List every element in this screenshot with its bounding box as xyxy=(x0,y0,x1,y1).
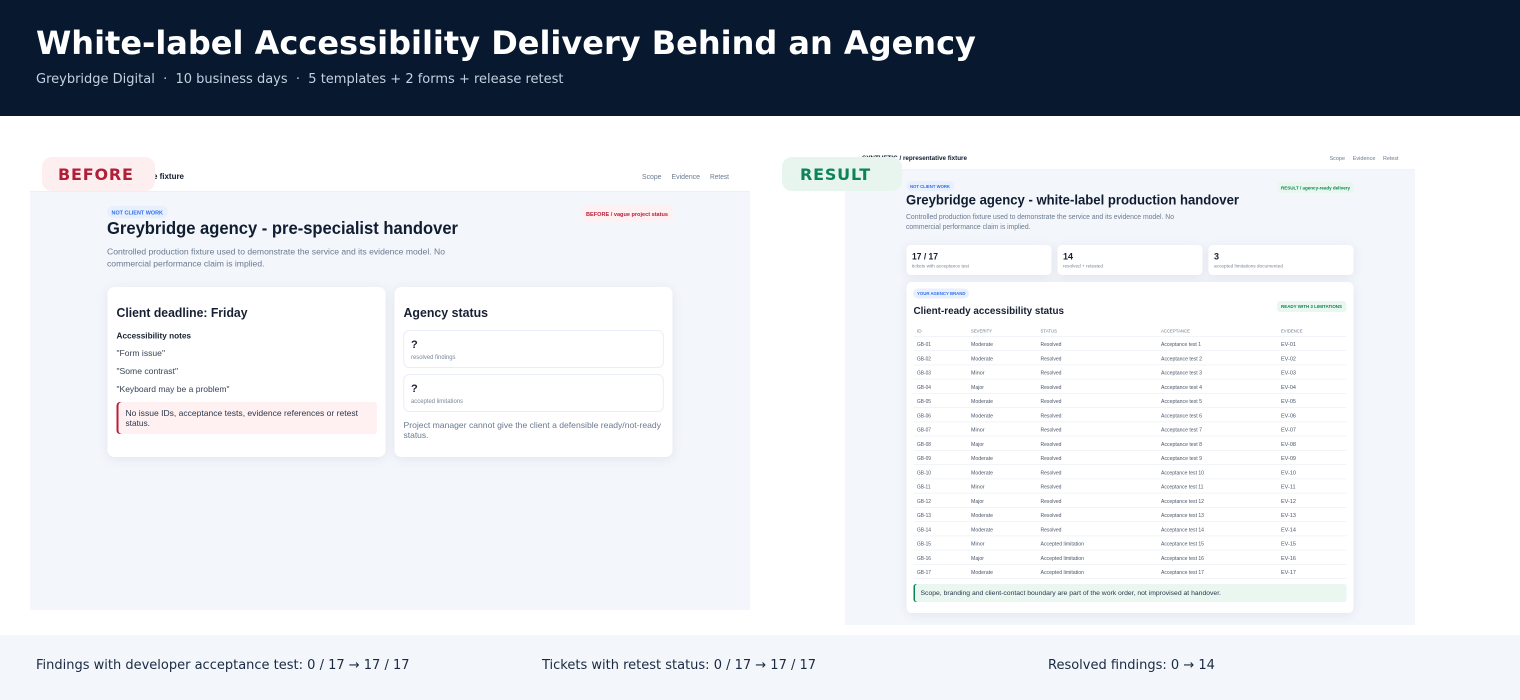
accessibility notes: "Some contrast" xyxy=(116,367,178,376)
stat: tickets with acceptance test: tickets with acceptance test xyxy=(912,264,970,270)
row GB-10: GB-10 xyxy=(917,470,931,476)
status badge: vague project status xyxy=(581,206,673,221)
metric: accepted limitations unknown: ? xyxy=(411,383,418,395)
stat: resolved and retested: resolved + retested xyxy=(1063,264,1103,270)
row GB-10: EV-10 xyxy=(1281,470,1296,476)
row GB-04: Resolved xyxy=(1040,385,1062,391)
row GB-11: EV-11 xyxy=(1281,485,1296,491)
chip: not client work: NOT CLIENT WORK xyxy=(112,210,164,216)
fixture navigation: Retest xyxy=(710,172,729,181)
row GB-07: Acceptance test 7 xyxy=(1161,428,1202,434)
row GB-15: Accepted limitation xyxy=(1040,542,1084,548)
row GB-13: EV-13 xyxy=(1281,513,1296,519)
row GB-06: EV-06 xyxy=(1281,413,1296,419)
card heading: agency status: Agency status xyxy=(404,306,488,320)
row GB-08: Resolved xyxy=(1040,442,1062,448)
fixture navigation: Evidence xyxy=(1353,156,1376,162)
row GB-03: GB-03 xyxy=(917,371,931,377)
row GB-15: EV-15 xyxy=(1281,542,1296,548)
row GB-09: EV-09 xyxy=(1281,456,1296,462)
row GB-16: GB-16 xyxy=(917,556,931,562)
row GB-14 xyxy=(914,527,1346,536)
metric: resolved findings unknown: ? xyxy=(411,339,418,351)
row GB-08: Major xyxy=(971,442,984,448)
table header: ACCEPTANCE xyxy=(1161,328,1190,333)
row GB-06: Acceptance test 6 xyxy=(1161,413,1202,419)
row GB-10: Moderate xyxy=(971,470,993,476)
row GB-03: Resolved xyxy=(1040,371,1062,377)
row GB-14: Resolved xyxy=(1040,527,1062,533)
row GB-02: Moderate xyxy=(971,356,993,362)
row GB-04 xyxy=(914,385,1346,393)
findings table xyxy=(914,328,1346,579)
row GB-05: GB-05 xyxy=(917,399,931,405)
row GB-07: Minor xyxy=(971,428,985,434)
row GB-17: EV-17 xyxy=(1281,570,1296,576)
row GB-09: Moderate xyxy=(971,456,993,462)
metric: resolved findings unknown xyxy=(404,330,663,368)
row GB-11: Minor xyxy=(971,485,985,491)
status badge: agency-ready delivery: RESULT / agency-ready delivery xyxy=(1281,186,1350,190)
before description: commercial performance claim is implied. xyxy=(107,258,264,268)
status badge: ready with limitations xyxy=(1277,301,1346,312)
row GB-11: Acceptance test 11 xyxy=(1161,485,1204,491)
row GB-14: GB-14 xyxy=(917,527,931,533)
chip: your agency brand: YOUR AGENCY BRAND xyxy=(917,291,966,297)
row GB-08: EV-08 xyxy=(1281,442,1296,448)
footer metrics band xyxy=(0,635,1520,700)
row GB-14: Moderate xyxy=(971,527,993,533)
fixture navigation xyxy=(1330,156,1399,162)
metric: accepted limitations unknown xyxy=(404,374,663,412)
project manager note xyxy=(404,420,662,440)
before label xyxy=(42,157,155,191)
status badge: vague project status: BEFORE / vague project status xyxy=(586,212,668,218)
metric: accepted limitations unknown: accepted limitations xyxy=(411,399,463,405)
row GB-14: EV-14 xyxy=(1281,527,1296,533)
callout: scope boundary: Scope, branding and client-contact boundary are part of the work order, not improvised at handover. xyxy=(920,590,1221,597)
fixture brand: SYNTHETIC / representative fixture xyxy=(51,171,184,181)
row GB-07: EV-07 xyxy=(1281,428,1296,434)
row GB-02: EV-02 xyxy=(1281,356,1296,362)
row GB-10 xyxy=(914,470,1346,479)
row GB-16: EV-16 xyxy=(1281,556,1296,562)
row GB-01: GB-01 xyxy=(917,342,931,348)
row GB-11: GB-11 xyxy=(917,485,931,491)
result heading: Greybridge agency - white-label production handover xyxy=(906,192,1240,208)
result label: RESULT xyxy=(800,165,871,184)
fixture navigation: Scope xyxy=(642,172,662,181)
row GB-08: Acceptance test 8 xyxy=(1161,442,1202,448)
row GB-09: Resolved xyxy=(1040,456,1062,462)
stat: resolved and retested: 14 xyxy=(1063,252,1073,262)
project manager note: Project manager cannot give the client a defensible ready/not-ready xyxy=(404,420,662,430)
row GB-03: Acceptance test 3 xyxy=(1161,371,1202,377)
row GB-04: EV-04 xyxy=(1281,385,1296,391)
status badge: ready with limitations: READY WITH 3 LIMITATIONS xyxy=(1281,304,1342,309)
stat: accepted limitations documented: accepted limitations documented xyxy=(1214,264,1283,270)
row GB-17: Acceptance test 17 xyxy=(1161,570,1204,576)
callout: missing evidence: status. xyxy=(126,419,150,428)
row GB-02: Acceptance test 2 xyxy=(1161,356,1202,362)
table header: EVIDENCE xyxy=(1281,328,1302,333)
chip: not client work: NOT CLIENT WORK xyxy=(910,184,950,190)
stat: accepted limitations documented: 3 xyxy=(1214,252,1219,262)
card: client-ready status xyxy=(906,282,1354,613)
row GB-01 xyxy=(914,342,1346,351)
row GB-09: GB-09 xyxy=(917,456,931,462)
table header: STATUS xyxy=(1040,328,1057,333)
row GB-14: Acceptance test 14 xyxy=(1161,527,1204,533)
stat: tickets with acceptance test xyxy=(906,245,1052,275)
fixture navigation: Scope xyxy=(1330,156,1345,162)
row GB-17: Moderate xyxy=(971,570,993,576)
result description: Controlled production fixture used to demonstrate the service and its evidence model. No xyxy=(906,214,1174,221)
row GB-13: Resolved xyxy=(1040,513,1062,519)
callout: missing evidence xyxy=(116,402,377,434)
accessibility notes: "Keyboard may be a problem" xyxy=(116,385,230,394)
project manager note: status. xyxy=(404,430,428,440)
row GB-02: GB-02 xyxy=(917,356,931,362)
result label xyxy=(782,157,902,191)
card heading: client-ready accessibility status: Client-ready accessibility status xyxy=(914,306,1064,317)
subtitle: Greybridge Digital · 10 business days · 5 templates + 2 forms + release retest xyxy=(36,72,564,87)
before description xyxy=(107,246,445,268)
row GB-01: Moderate xyxy=(971,342,993,348)
table header: ID xyxy=(917,328,922,333)
row GB-05: Resolved xyxy=(1040,399,1062,405)
row GB-10: Resolved xyxy=(1040,470,1062,476)
accessibility notes xyxy=(116,332,230,394)
row GB-03: EV-03 xyxy=(1281,371,1296,377)
row GB-06 xyxy=(914,413,1346,422)
row GB-07: Resolved xyxy=(1040,428,1062,434)
row GB-17: Accepted limitation xyxy=(1040,570,1084,576)
row GB-04: Major xyxy=(971,385,984,391)
before description: Controlled production fixture used to demonstrate the service and its evidence model. No xyxy=(107,246,445,256)
header band xyxy=(0,0,1520,116)
stat: resolved and retested xyxy=(1058,245,1202,275)
row GB-08 xyxy=(914,442,1346,450)
callout: missing evidence: No issue IDs, acceptance tests, evidence references or retest xyxy=(126,409,359,418)
row GB-17 xyxy=(914,570,1346,579)
row GB-02 xyxy=(914,356,1346,365)
row GB-05 xyxy=(914,399,1346,408)
row GB-17: GB-17 xyxy=(917,570,931,576)
result description xyxy=(906,214,1174,231)
row GB-05: Moderate xyxy=(971,399,993,405)
stat: tickets with acceptance test: 17 / 17 xyxy=(912,252,938,262)
row GB-06: Moderate xyxy=(971,413,993,419)
chip: not client work xyxy=(107,206,168,218)
row GB-09: Acceptance test 9 xyxy=(1161,456,1202,462)
row GB-01: EV-01 xyxy=(1281,342,1296,348)
row GB-16: Major xyxy=(971,556,984,562)
row GB-09 xyxy=(914,456,1346,465)
fixture navigation: Retest xyxy=(1383,156,1399,162)
card: client deadline xyxy=(108,287,386,457)
before heading: Greybridge agency - pre-specialist handover xyxy=(107,218,458,238)
row GB-08: GB-08 xyxy=(917,442,931,448)
result description: commercial performance claim is implied. xyxy=(906,224,1031,231)
card heading: client deadline: Client deadline: Friday xyxy=(116,306,248,320)
chip: your agency brand xyxy=(913,288,969,298)
row GB-13: Moderate xyxy=(971,513,993,519)
row GB-13: GB-13 xyxy=(917,513,931,519)
metric: retest status: Tickets with retest status: 0 / 17 → 17 / 17 xyxy=(541,658,816,673)
row GB-06: Resolved xyxy=(1040,413,1062,419)
row GB-12: EV-12 xyxy=(1281,499,1296,505)
fixture brand: SYNTHETIC / representative fixture xyxy=(862,155,967,162)
row GB-12: GB-12 xyxy=(917,499,931,505)
table header xyxy=(914,328,1346,336)
stat: accepted limitations documented xyxy=(1208,245,1354,275)
row GB-16 xyxy=(914,556,1346,564)
metric: resolved findings: Resolved findings: 0 → 14 xyxy=(1048,658,1215,673)
row GB-15: Minor xyxy=(971,542,985,548)
accessibility notes: "Form issue" xyxy=(116,349,165,358)
row GB-11: Resolved xyxy=(1040,485,1062,491)
row GB-03 xyxy=(914,371,1346,379)
row GB-04: Acceptance test 4 xyxy=(1161,385,1202,391)
card: agency status xyxy=(394,287,672,457)
row GB-13 xyxy=(914,513,1346,522)
row GB-03: Minor xyxy=(971,371,985,377)
row GB-06: GB-06 xyxy=(917,413,931,419)
row GB-01: Acceptance test 1 xyxy=(1161,342,1201,348)
row GB-12 xyxy=(914,499,1346,507)
row GB-11 xyxy=(914,485,1346,493)
metric: acceptance tests: Findings with developer acceptance test: 0 / 17 → 17 / 17 xyxy=(36,658,410,673)
callout: scope boundary xyxy=(914,584,1346,602)
title: White-label Accessibility Delivery Behind an Agency xyxy=(36,24,976,62)
row GB-16: Acceptance test 16 xyxy=(1161,556,1204,562)
before label: BEFORE xyxy=(58,165,134,184)
row GB-12: Acceptance test 12 xyxy=(1161,499,1204,505)
row GB-05: EV-05 xyxy=(1281,399,1296,405)
chip: not client work xyxy=(906,181,954,191)
status badge: agency-ready delivery xyxy=(1277,182,1354,193)
table header: SEVERITY xyxy=(971,328,993,333)
panel: before screenshot xyxy=(30,156,750,610)
row GB-10: Acceptance test 10 xyxy=(1161,470,1204,476)
row GB-07 xyxy=(914,428,1346,436)
row GB-15: GB-15 xyxy=(917,542,931,548)
row GB-15: Acceptance test 15 xyxy=(1161,542,1204,548)
metric: resolved findings unknown: resolved findings xyxy=(411,355,456,361)
row GB-05: Acceptance test 5 xyxy=(1161,399,1202,405)
row GB-13: Acceptance test 13 xyxy=(1161,513,1204,519)
row GB-12: Major xyxy=(971,499,984,505)
row GB-15 xyxy=(914,542,1346,550)
fixture navigation: Evidence xyxy=(672,172,700,181)
accessibility notes: Accessibility notes xyxy=(116,332,191,340)
row GB-16: Accepted limitation xyxy=(1040,556,1084,562)
panel: result screenshot xyxy=(845,150,1415,625)
fixture navigation xyxy=(642,172,729,181)
row GB-07: GB-07 xyxy=(917,428,931,434)
row GB-04: GB-04 xyxy=(917,385,931,391)
row GB-01: Resolved xyxy=(1040,342,1062,348)
row GB-02: Resolved xyxy=(1040,356,1062,362)
row GB-12: Resolved xyxy=(1040,499,1062,505)
